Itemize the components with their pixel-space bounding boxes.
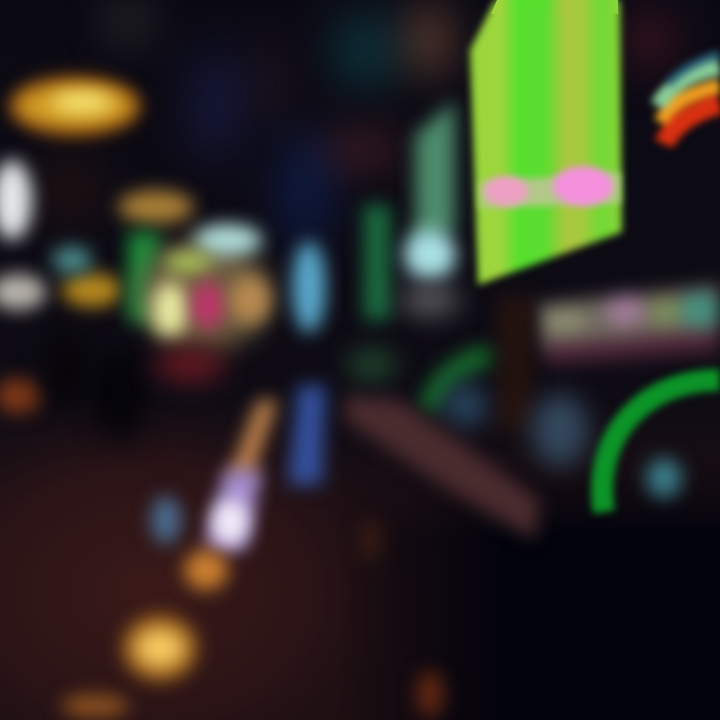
upper background: dim blue and brown structures xyxy=(44,2,676,250)
reflection: blue strip xyxy=(288,385,326,485)
light blue column xyxy=(292,241,326,333)
sign: yellow-orange ceiling light xyxy=(9,76,141,136)
reflection: orange spot xyxy=(184,550,228,590)
reflection: orange-white strip xyxy=(228,400,278,480)
pale band across screen xyxy=(480,172,620,208)
lower right dark area xyxy=(390,485,720,720)
reflection: orange streak right xyxy=(416,670,444,718)
dark support post xyxy=(497,295,533,430)
reflection: bottom glow xyxy=(61,694,129,718)
rainbow sign xyxy=(658,54,720,144)
green and cyan column xyxy=(364,100,460,320)
central colourful storefront xyxy=(140,224,270,383)
floor: warm reflective ground xyxy=(0,400,420,720)
large green screen xyxy=(470,0,622,285)
small green arc on counter xyxy=(428,355,490,410)
reflections on floor xyxy=(61,385,444,718)
dim blue and grey clutter xyxy=(348,349,588,466)
left shopfront lights xyxy=(0,160,194,440)
large green arc xyxy=(602,380,720,512)
pink patch left xyxy=(484,176,528,206)
reflection: bright bottom spot xyxy=(122,614,198,682)
brown counter edge xyxy=(345,395,540,540)
right side multicolour shelf band xyxy=(535,285,720,365)
reflection: blue spot xyxy=(151,496,181,544)
pink patch right xyxy=(553,166,613,206)
